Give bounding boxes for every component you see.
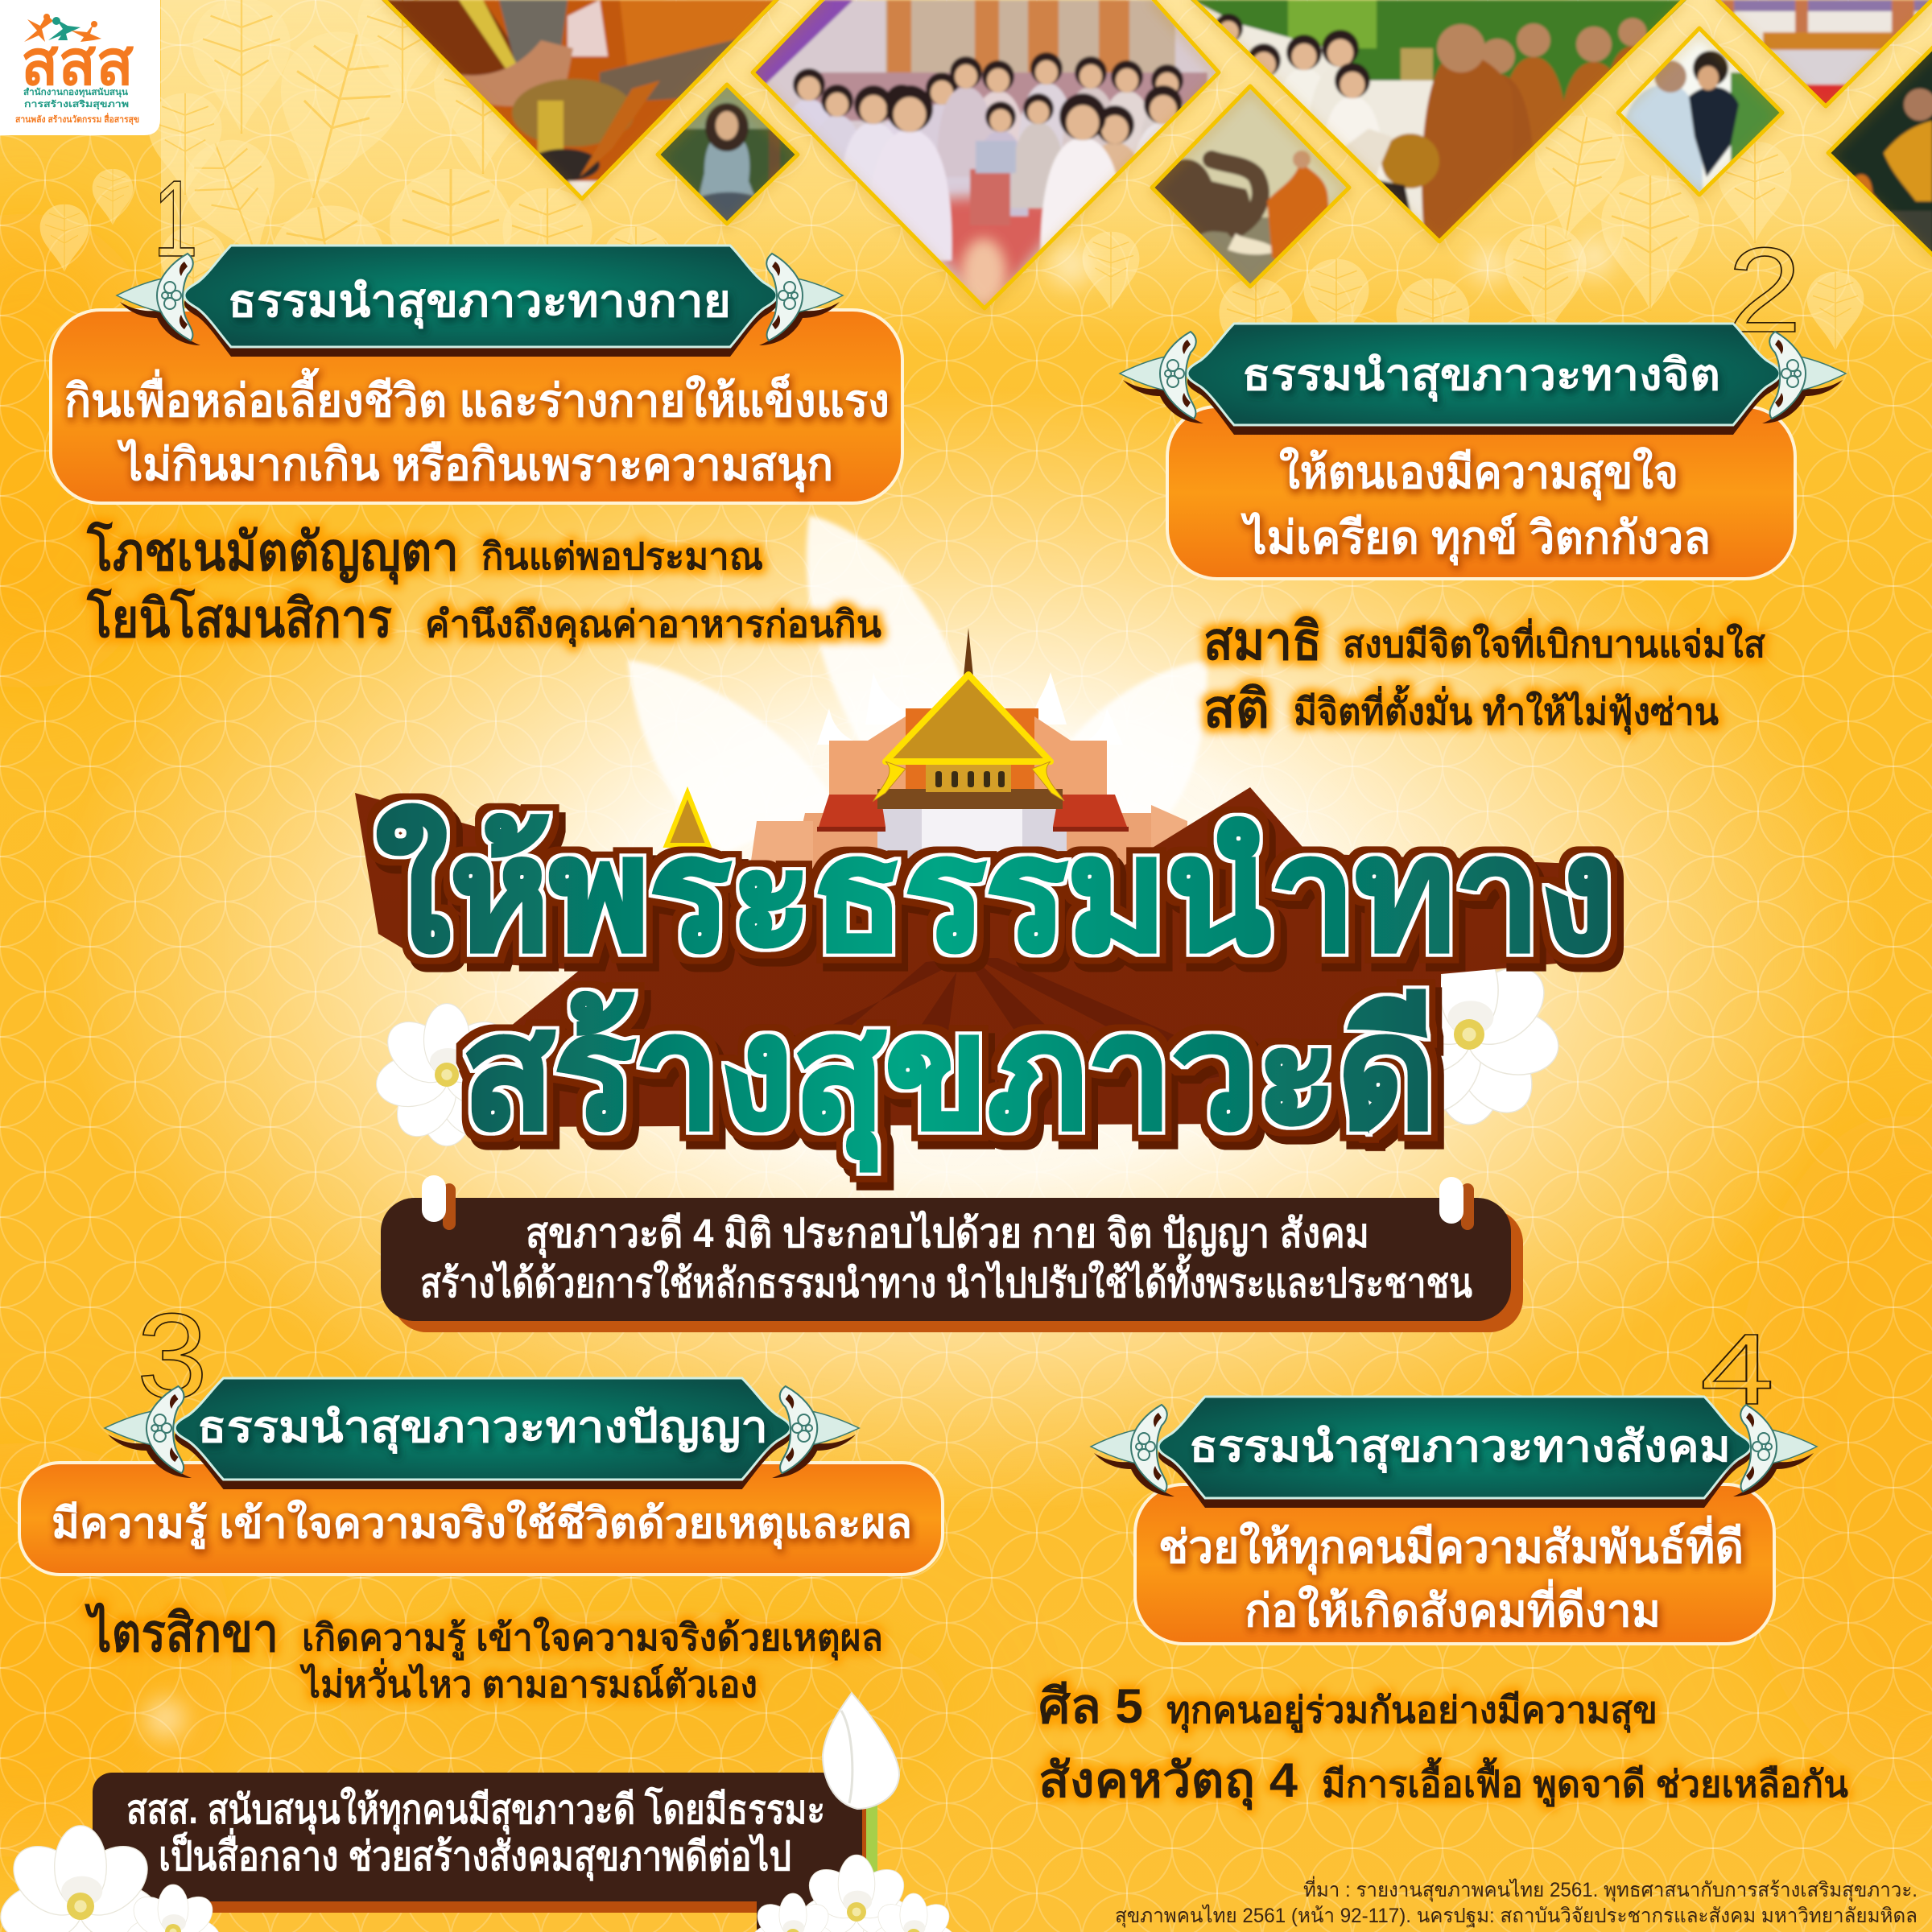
source note: ที่มา : รายงานสุขภาพคนไทย 2561. พุทธศาสนากับการสร้างเสริมสุขภาวะ. [1303,1876,1918,1902]
section 2 [1120,222,1846,738]
photo collage [378,0,1932,314]
callout text [126,1785,825,1881]
teachings 1: กินแต่พอประมาณ [481,535,763,577]
lotus bud [823,1693,899,1892]
number 1: 1 [153,158,198,279]
teachings 4: มีการเอื้อเฟื้อ พูดจาดี ช่วยเหลือกัน [1322,1757,1849,1807]
temple illustration [667,628,1187,886]
number 2: 2 [1728,222,1802,357]
number 3: 3 [137,1288,208,1423]
source note [1115,1876,1918,1928]
body 4 text: ช่วยให้ทุกคนมีความสัมพันธ์ที่ดี [1158,1515,1744,1575]
body box 1 [51,310,902,503]
logo [0,0,160,135]
scroll pins [422,1175,1474,1230]
central callout [381,1175,1523,1332]
body 1 text [64,368,890,493]
body 2 text [1241,446,1711,566]
central text: สร้างได้ด้วยการใช้หลักธรรมนำทาง นำไปปรับใช้ได้ทั้งพระและประชาชน [420,1253,1472,1306]
photo: monk holding alms bowl [378,0,781,201]
teachings 4: สังคหวัตถุ 4 [1038,1753,1298,1810]
callout text: เป็นสื่อกลาง ช่วยสร้างสังคมสุขภาพดีต่อไป [159,1828,791,1881]
body 1 text: ไม่กินมากเกิน หรือกินเพราะความสนุก [117,438,833,493]
central text [420,1210,1472,1306]
body box 2 [1167,407,1795,579]
banner 2 [1120,324,1846,435]
banner 4 [1091,1397,1817,1508]
body 4 text [1158,1515,1744,1636]
body 4 text: ก่อให้เกิดสังคมที่ดีงาม [1245,1579,1661,1636]
section 1 [51,158,902,648]
banner 3 title: ธรรมนำสุขภาวะทางปัญญา [197,1403,768,1455]
body 2 text: ไม่เครียด ทุกข์ วิตกกังวล [1241,511,1711,566]
title rays [355,787,1618,1127]
body 2 text: ให้ตนเองมีความสุขใจ [1279,446,1678,501]
teachings 1: โภชเนมัตตัญญุตา [86,520,459,585]
banner 1 [117,246,843,357]
teachings 4: ทุกคนอยู่ร่วมกันอย่างมีความสุข [1166,1689,1657,1733]
teachings 3: เกิดความรู้ เข้าใจความจริงด้วยเหตุผล [302,1616,883,1661]
photo: monk and elephant [1154,89,1346,283]
body box 3 [19,1463,943,1575]
section 4 [1038,1314,1849,1810]
logo figures [24,14,101,42]
photo: laypeople praying in temple hall [749,0,1232,314]
body 3 text: มีความรู้ เข้าใจความจริงใช้ชีวิตด้วยเหตุและผล [52,1499,912,1550]
body 1 text: กินเพื่อหล่อเลี้ยงชีวิต และร่างกายให้แข็งแรง [64,368,890,426]
main title [376,804,1614,1171]
banner 2 title: ธรรมนำสุขภาวะทางจิต [1242,351,1720,402]
teachings 2: สติ [1203,679,1269,738]
photo: monk blessing a novice [1823,44,1932,259]
teachings 1: โยนิโสมนสิการ [86,587,392,648]
small side temple [667,793,708,845]
side lotus flowers [372,944,1563,1148]
banner 4 title: ธรรมนำสุขภาวะทางสังคม [1189,1422,1731,1474]
photo: temple ceremony [1715,0,1932,109]
teachings 4: ศีล 5 [1038,1679,1143,1733]
logo: สำนักงานกองทุนสนับสนุน [23,87,129,98]
photo frames [382,0,1932,308]
callout text: สสส. สนับสนุนให้ทุกคนมีสุขภาวะดี โดยมีธรรมะ [126,1785,825,1835]
teachings 3: ไม่หวั่นไหว ตามอารมณ์ตัวเอง [299,1658,758,1705]
teachings 3 [85,1602,883,1705]
photo: helping an elderly man [1614,24,1787,197]
main title: สร้างสุขภาวะดี [462,985,1435,1171]
photo: alms giving to monks [1183,0,1690,258]
teachings 2 [1203,611,1766,738]
main title: ให้พระธรรมนำทาง [376,804,1614,983]
bottom callout [93,1773,872,1932]
teachings 2: สมาธิ [1203,611,1322,671]
teachings 2: มีจิตที่ตั้งมั่น ทำให้ไม่ฟุ้งซ่าน [1294,684,1719,735]
section 3 [19,1288,943,1705]
body box 4 [1135,1484,1774,1644]
teachings 2: สงบมีจิตใจที่เบิกบานแจ่มใส [1343,618,1766,665]
spire and gable [964,628,973,676]
teachings 1: คำนึงถึงคุณค่าอาหารก่อนกิน [425,603,882,647]
logo: สานพลัง สร้างนวัตกรรม สื่อสารสุข [15,113,139,126]
teachings 4 [1038,1679,1849,1810]
banner 1 title: ธรรมนำสุขภาวะทางกาย [228,275,731,329]
source note: สุขภาพคนไทย 2561 (หน้า 92-117). นครปฐม: สถาบันวิจัยประชากรและสังคม มหาวิทยาลัยมหิดล [1115,1904,1918,1928]
logo: การสร้างเสริมสุขภาพ [24,99,129,110]
banner 3 [105,1378,859,1489]
photo: child meditating [660,87,795,221]
teachings 1 [86,520,882,648]
number 4: 4 [1700,1314,1774,1426]
logo: สสส [21,27,134,98]
bottom lotus flowers [0,1826,959,1932]
teachings 3: ไตรสิกขา [85,1602,279,1662]
central text: สุขภาวะดี 4 มิติ ประกอบไปด้วย กาย จิต ปัญญา สังคม [526,1210,1369,1258]
